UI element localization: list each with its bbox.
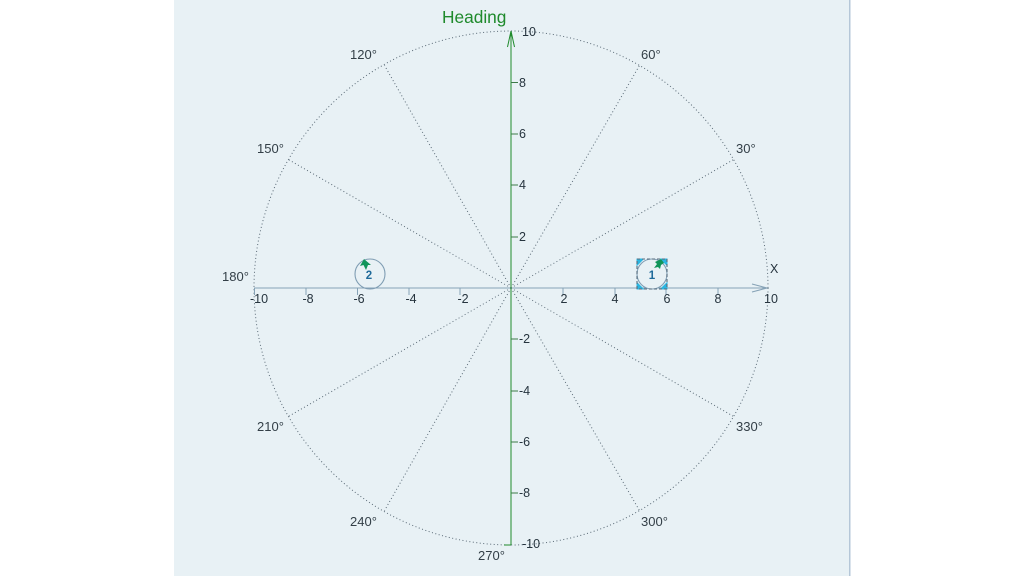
heading axis tick labels: 8 [519, 76, 526, 90]
heading axis tick labels: -2 [519, 332, 530, 346]
x axis tick labels [250, 292, 778, 306]
x axis tick labels: 10 [764, 292, 778, 306]
data point 2: 2 [366, 270, 372, 282]
x axis tick labels: -6 [353, 292, 365, 306]
angle labels: 210° [257, 419, 284, 434]
x axis tick labels: 2 [561, 292, 568, 306]
x axis tick labels: 6 [664, 292, 671, 306]
x axis label: X [770, 262, 779, 276]
heading axis tick labels: -6 [519, 435, 530, 449]
heading axis tick labels: -8 [519, 486, 530, 500]
heading axis tick labels: 4 [519, 178, 526, 192]
angle labels: 30° [736, 141, 756, 156]
angle labels: 330° [736, 419, 763, 434]
heading axis tick labels: -4 [519, 384, 530, 398]
panel right border [849, 0, 850, 576]
heading axis tick labels: -10 [522, 537, 540, 551]
heading axis tick labels: 2 [519, 230, 526, 244]
angle labels: 270° [478, 548, 505, 563]
x axis tick labels: -10 [250, 292, 268, 306]
heading axis tick labels: 6 [519, 127, 526, 141]
angle labels: 60° [641, 47, 661, 62]
angle labels: 180° [222, 269, 249, 284]
heading axis title: Heading [442, 7, 506, 27]
data point 1 (selected) [636, 258, 668, 290]
polar grid [254, 31, 768, 545]
angle labels: 150° [257, 141, 284, 156]
angle labels: 120° [350, 47, 377, 62]
x axis tick labels: 4 [612, 292, 619, 306]
angle labels [222, 47, 763, 563]
data point 2 [355, 259, 385, 289]
x axis tick labels: -8 [302, 292, 314, 306]
heading axis tick labels: 10 [522, 25, 536, 39]
panel: chart background [174, 0, 849, 576]
x axis with arrow and ticks [254, 284, 767, 295]
heading axis tick labels [519, 25, 540, 551]
data point 1 (selected): 1 [649, 270, 656, 282]
x axis tick labels: -2 [457, 292, 469, 306]
x axis tick labels: -4 [405, 292, 417, 306]
angle labels: 240° [350, 514, 377, 529]
x axis tick labels: 8 [715, 292, 722, 306]
angle labels: 300° [641, 514, 668, 529]
heading axis with arrow and ticks [504, 31, 518, 545]
